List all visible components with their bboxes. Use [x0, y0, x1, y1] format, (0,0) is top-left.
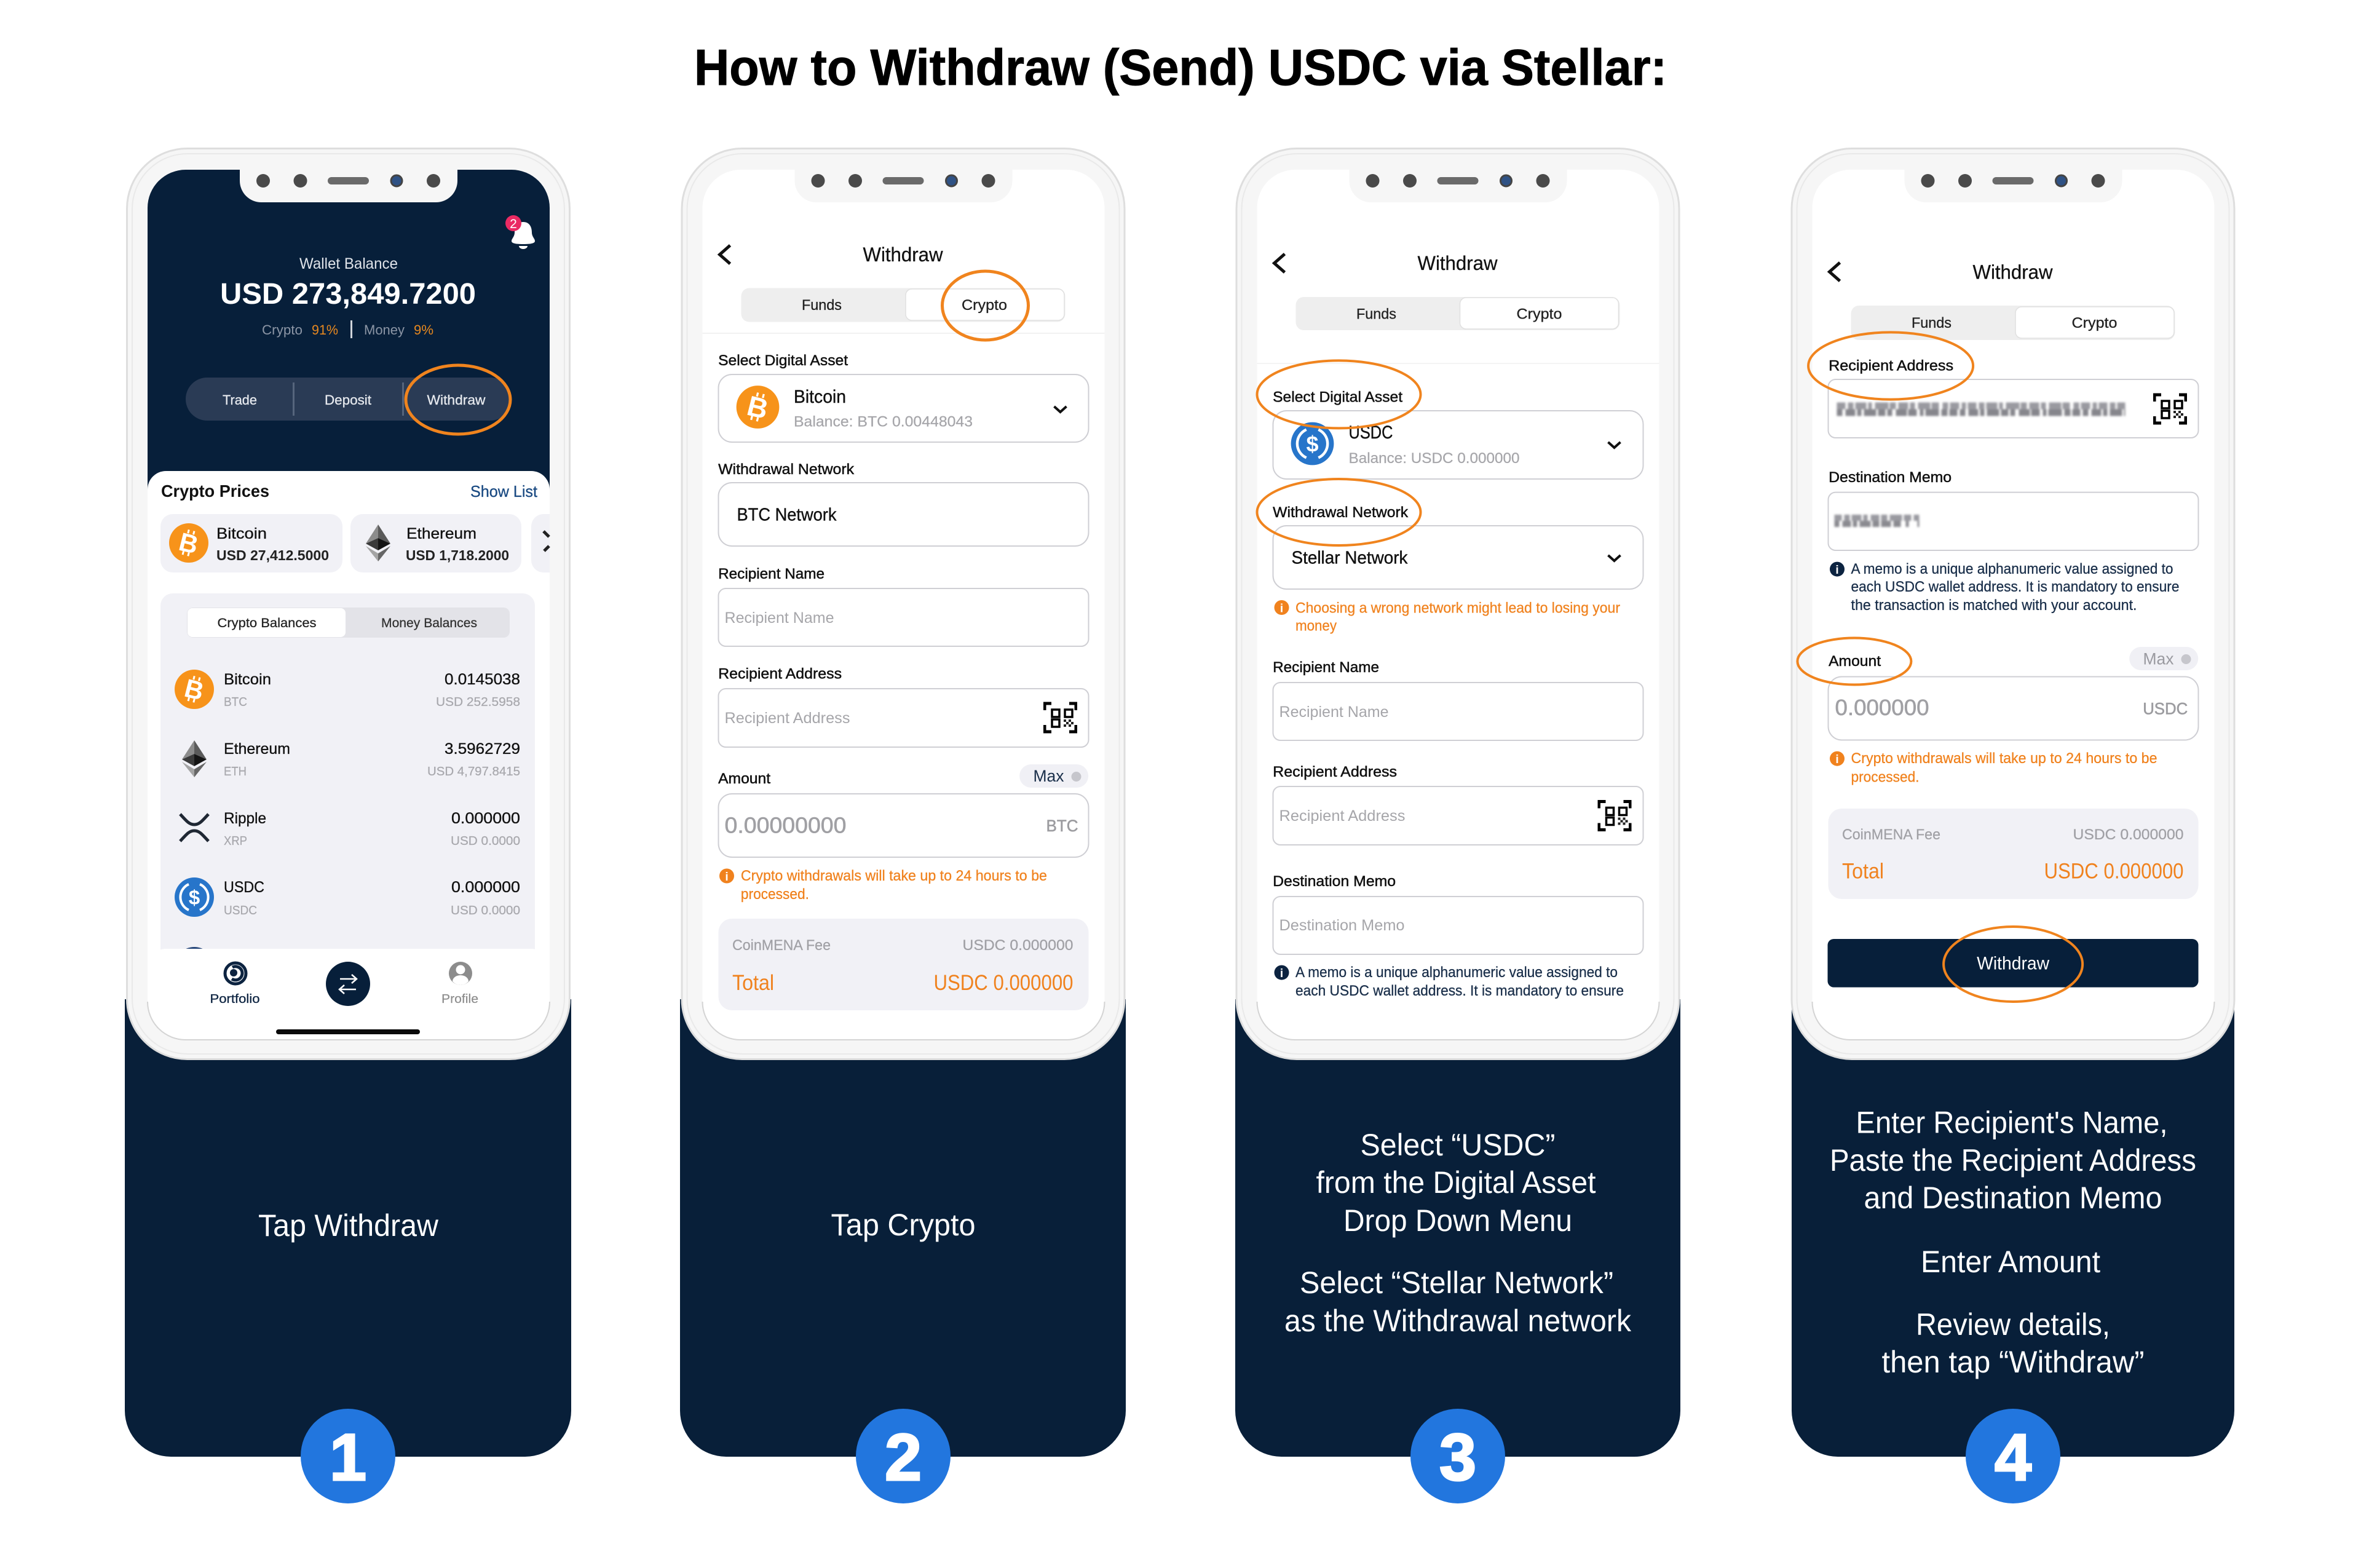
field: digital asset: Balance: BTC 0.00448043	[794, 413, 973, 430]
price card: bitcoin	[160, 514, 342, 572]
field: digital asset: Bitcoin	[794, 387, 846, 407]
row: ethereum: 3.5962729	[445, 740, 520, 758]
field: amount: USDC	[2143, 700, 2188, 718]
balance tabs	[187, 608, 510, 638]
caption 4: and Destination Memo	[1864, 1181, 2162, 1215]
row: ethereum: USD 4,797.8415	[427, 765, 520, 778]
field: amount: Max	[2143, 650, 2174, 668]
camera dots	[256, 174, 440, 188]
field: network: Withdrawal Network	[718, 461, 855, 478]
memo note: the transaction is matched with your account.	[1851, 597, 2137, 614]
memo note: A memo is a unique alphanumeric value assigned to	[1295, 964, 1618, 981]
camera dots	[1921, 174, 2105, 188]
navy panel 4	[1792, 999, 2234, 1457]
field: amount: BTC	[1046, 817, 1078, 835]
fee summary	[718, 919, 1088, 1010]
warning note	[1274, 600, 1620, 635]
field: network: Withdrawal Network	[1273, 504, 1409, 521]
fee summary: Total	[732, 971, 774, 995]
action bar: Deposit	[325, 392, 371, 408]
row: ethereum	[182, 740, 520, 778]
row: usdc: 0.000000	[451, 879, 520, 896]
row: usdc: USDC	[224, 879, 264, 896]
highlight: withdraw	[406, 365, 510, 434]
field: amount: Max	[1033, 767, 1064, 785]
allocation	[262, 320, 433, 338]
field: network: Stellar Network	[1291, 548, 1408, 568]
step badge 4	[1966, 1409, 2060, 1503]
heading: Withdraw	[1418, 252, 1498, 274]
screen bottom edge	[1813, 1002, 2215, 1040]
row: usdc: USDC	[224, 904, 257, 917]
field: destination memo: Destination Memo	[1829, 469, 1952, 486]
screen	[702, 170, 1104, 1040]
back arrow	[719, 245, 730, 264]
phone frame	[682, 149, 1125, 1059]
warning note: Crypto withdrawals will take up to 24 hours to be	[741, 868, 1047, 884]
row: ethereum: Ethereum	[224, 740, 290, 758]
crypto prices heading: Crypto Prices	[161, 481, 269, 501]
field: digital asset: B	[744, 390, 772, 426]
heading: Withdraw	[863, 244, 943, 266]
memo note: i	[1835, 564, 1839, 577]
action bar: Withdraw	[427, 392, 486, 408]
phone frame	[1792, 149, 2234, 1059]
field: digital asset: Select Digital Asset	[718, 352, 848, 369]
memo note: each USDC wallet address. It is mandatory to ensure	[1295, 983, 1624, 999]
camera dots	[812, 174, 995, 188]
field: recipient name: Recipient Name	[1279, 703, 1388, 721]
field: recipient name: Recipient Name	[724, 609, 834, 627]
memo note: each USDC wallet address. It is mandatory to ensure	[1851, 579, 2179, 595]
nav: portfolio: Portfolio	[210, 992, 259, 1006]
fee summary: CoinMENA Fee	[1842, 826, 1940, 843]
field: digital asset: Select Digital Asset	[1273, 389, 1402, 406]
field: recipient address: Recipient Address	[1279, 807, 1406, 825]
field: recipient address: Recipient Address	[724, 710, 850, 727]
caption 4: Review details,	[1916, 1307, 2110, 1342]
camera dots	[1366, 174, 1549, 188]
tabs: Funds	[1356, 306, 1396, 322]
step badge 1	[301, 1409, 395, 1503]
memo note	[1830, 561, 2179, 614]
asset panel	[160, 593, 535, 975]
field: amount	[718, 764, 1088, 857]
phone 2: withdraw BTC form	[682, 149, 1125, 1059]
step badge 2: 2	[885, 1420, 922, 1494]
nav: profile: Profile	[441, 992, 478, 1006]
field: recipient address	[1273, 764, 1643, 845]
field: destination memo: Destination Memo	[1279, 917, 1404, 934]
warning note: i	[1835, 753, 1839, 766]
row: usdc: $	[189, 886, 200, 909]
field: recipient name	[718, 566, 1088, 646]
tabs	[1851, 306, 2175, 340]
screen	[1257, 170, 1659, 1040]
highlight: withdraw button	[1944, 927, 2082, 1002]
notch	[1905, 170, 2122, 202]
balance card	[148, 471, 550, 493]
field: destination memo	[1829, 469, 2199, 550]
memo note: A memo is a unique alphanumeric value assigned to	[1851, 561, 2173, 577]
action bar: Trade	[223, 392, 257, 408]
highlight: digital asset	[1257, 360, 1420, 428]
row: ethereum: ETH	[224, 765, 247, 778]
nav: portfolio	[210, 963, 259, 1006]
step 2 card	[680, 149, 1126, 1503]
caption 3: as the Withdrawal network	[1284, 1304, 1632, 1338]
field: recipient name	[1273, 659, 1643, 740]
caption 3: Select “Stellar Network”	[1300, 1265, 1613, 1300]
warning note	[1830, 750, 2157, 785]
field: digital asset: $	[1306, 432, 1319, 457]
warning note: i	[1280, 603, 1283, 615]
price card: partial	[531, 514, 550, 572]
balance value: USD 273,849.7200	[220, 278, 476, 311]
phone 3: select USDC and Stellar	[1236, 149, 1679, 1059]
warning note: Choosing a wrong network might lead to losing your	[1295, 600, 1620, 616]
allocation: Money	[364, 322, 405, 338]
field: recipient address	[718, 666, 1088, 747]
step badge 3	[1410, 1409, 1505, 1503]
caption 4: Enter Amount	[1921, 1245, 2100, 1279]
tabs: Funds	[1912, 315, 1952, 331]
notch	[794, 170, 1012, 202]
highlight: crypto tab	[942, 271, 1028, 340]
field: destination memo	[1273, 873, 1643, 954]
withdraw button: Withdraw	[1977, 953, 2049, 974]
highlight: amount	[1797, 638, 1911, 685]
fee summary: USDC 0.000000	[963, 937, 1074, 954]
withdraw button	[1827, 939, 2199, 988]
phone 1: portfolio screen	[127, 149, 569, 1059]
allocation: 9%	[414, 322, 433, 338]
field: recipient name: Recipient Name	[718, 566, 825, 582]
fee summary: Total	[1842, 860, 1884, 884]
tabs: Funds	[802, 297, 842, 314]
bottom nav	[160, 949, 535, 986]
step badge 4: 4	[1995, 1420, 2031, 1494]
field: network	[718, 461, 1088, 546]
warning note: processed.	[741, 886, 809, 903]
field: network	[1273, 504, 1643, 589]
field: amount: Amount	[1829, 653, 1881, 670]
row: ripple	[180, 810, 520, 848]
field: recipient address: Recipient Address	[1273, 764, 1397, 780]
field: network: BTC Network	[737, 505, 837, 525]
caption 4: then tap “Withdraw”	[1881, 1345, 2145, 1379]
field: amount: 0.000000	[1835, 695, 1929, 720]
phone frame	[1236, 149, 1679, 1059]
tabs	[742, 288, 1065, 322]
field: recipient address	[1829, 358, 2199, 438]
caption 3: Drop Down Menu	[1343, 1203, 1572, 1238]
field: digital asset: USDC	[1349, 422, 1393, 443]
warning note: money	[1295, 617, 1337, 635]
price card: bitcoin: Bitcoin	[216, 525, 267, 542]
field: recipient address: Recipient Address	[1829, 358, 1953, 374]
warning note	[719, 868, 1047, 903]
row: bitcoin: B	[181, 673, 207, 706]
step 4 card	[1792, 149, 2234, 1503]
field: destination memo: Destination Memo	[1273, 873, 1396, 890]
row: bitcoin: Bitcoin	[224, 671, 271, 688]
action bar	[186, 378, 512, 421]
field: digital asset	[718, 352, 1088, 442]
price card: bitcoin: USD 27,412.5000	[216, 547, 329, 563]
row: ripple: USD 0.0000	[451, 834, 520, 848]
screen	[1813, 170, 2215, 1040]
highlight: recipient address	[1808, 332, 1973, 400]
tabs: Crypto	[2072, 315, 2118, 331]
navy panel 3	[1235, 999, 1680, 1457]
balance tabs: Crypto Balances	[218, 616, 316, 630]
row: usdc: USD 0.0000	[451, 904, 520, 917]
field: digital asset: Balance: USDC 0.000000	[1349, 450, 1520, 467]
notch	[1349, 170, 1567, 202]
icon: bell	[505, 215, 535, 249]
fee summary: USDC 0.000000	[933, 971, 1074, 995]
row: bitcoin: 0.0145038	[445, 671, 520, 688]
screen bottom edge	[1257, 1002, 1659, 1040]
row: ripple: XRP	[224, 834, 247, 848]
tabs: Crypto	[1516, 306, 1562, 322]
row: bitcoin: BTC	[224, 695, 247, 709]
row: usdc	[175, 877, 520, 917]
step badge 2	[856, 1409, 951, 1503]
screen bottom edge	[148, 1002, 550, 1040]
row: bitcoin: USD 252.5958	[436, 695, 520, 709]
step 3 card	[1235, 149, 1680, 1503]
caption 4: Enter Recipient's Name,	[1856, 1106, 2168, 1140]
price card: ethereum: USD 1,718.2000	[406, 547, 509, 563]
tabs	[1296, 297, 1619, 330]
caption 1: Tap Withdraw	[258, 1208, 439, 1243]
icon: bell: 2	[510, 217, 517, 231]
field: amount	[1829, 647, 2199, 740]
home indicator	[276, 1029, 420, 1034]
screen bottom edge	[702, 1002, 1104, 1040]
allocation: Crypto	[262, 322, 303, 338]
warning note: processed.	[1851, 769, 1920, 785]
memo note: i	[1280, 967, 1283, 980]
field: recipient name: Recipient Name	[1273, 659, 1379, 676]
title: How to Withdraw (Send) USDC via Stellar:	[694, 39, 1667, 96]
navy panel 1	[125, 999, 571, 1457]
step badge 1: 1	[330, 1420, 366, 1494]
navy panel 2	[680, 999, 1126, 1457]
phone 4: completed form	[1792, 149, 2234, 1059]
field: amount: 0.00000000	[724, 813, 846, 838]
caption 3: from the Digital Asset	[1316, 1165, 1596, 1200]
price card: bitcoin: B	[176, 527, 201, 560]
screen	[148, 170, 550, 1045]
peek icon	[186, 947, 203, 949]
notch	[240, 170, 457, 202]
row: ripple: Ripple	[224, 810, 266, 827]
wallet balance: Wallet Balance	[299, 255, 398, 272]
field: digital asset	[1273, 389, 1643, 479]
fee summary: CoinMENA Fee	[732, 937, 831, 954]
allocation: 91%	[312, 322, 338, 338]
heading: Withdraw	[1972, 261, 2053, 283]
field: amount: Amount	[718, 770, 770, 787]
caption 4	[1830, 1106, 2196, 1379]
fee summary	[1829, 809, 2199, 899]
field: recipient address: Recipient Address	[718, 666, 842, 683]
balance tabs: Money Balances	[381, 616, 477, 630]
price card: ethereum: Ethereum	[406, 525, 477, 542]
caption 4: Paste the Recipient Address	[1830, 1143, 2196, 1178]
caption 2: Tap Crypto	[831, 1208, 975, 1242]
price card: ethereum	[350, 514, 521, 572]
row: bitcoin	[175, 670, 520, 709]
caption 3: Select “USDC”	[1360, 1128, 1556, 1162]
tabs: Crypto	[962, 297, 1007, 314]
fee summary: USDC 0.000000	[2073, 826, 2184, 843]
nav: swap button	[326, 962, 370, 1006]
back arrow	[1274, 254, 1285, 272]
step badge 3: 3	[1439, 1420, 1476, 1494]
show list link: Show List	[470, 482, 538, 501]
back arrow	[1830, 263, 1840, 281]
fee summary: USDC 0.000000	[2044, 860, 2184, 884]
caption 3	[1284, 1128, 1632, 1338]
highlight: network	[1257, 479, 1420, 545]
row: ripple: 0.000000	[451, 810, 520, 827]
warning note: i	[725, 871, 729, 884]
phone frame	[127, 149, 569, 1059]
nav: profile	[441, 962, 478, 1006]
step 1 card	[125, 149, 571, 1503]
memo note	[1274, 964, 1624, 999]
warning note: Crypto withdrawals will take up to 24 hours to be	[1851, 750, 2157, 767]
